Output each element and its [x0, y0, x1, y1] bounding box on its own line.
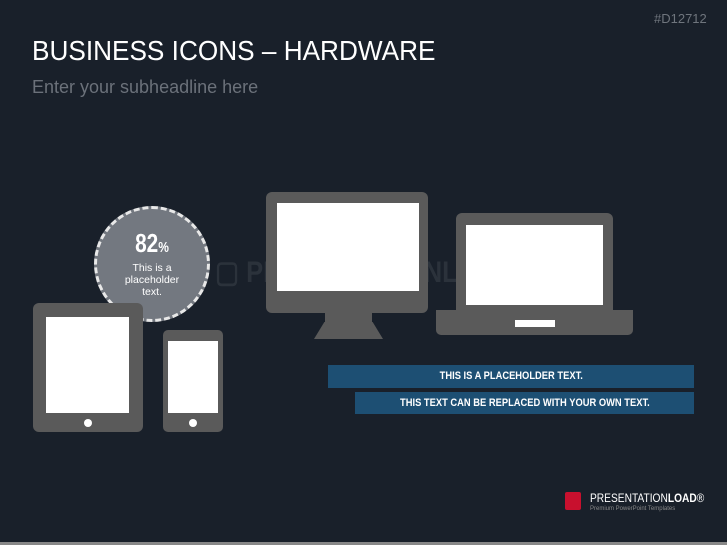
- subheadline: Enter your subheadline here: [32, 77, 258, 97]
- percentage circle: placeholder: [125, 274, 179, 286]
- watermark: ▢ PRESENTATIONLOAD: [215, 256, 514, 289]
- icon: phone: [163, 330, 223, 432]
- logo: [565, 491, 704, 512]
- banner 2: THIS TEXT CAN BE REPLACED WITH YOUR OWN TEXT.: [400, 397, 649, 409]
- banner 1: THIS IS A PLACEHOLDER TEXT.: [439, 370, 583, 382]
- icon: tablet: [33, 303, 143, 432]
- icon: monitor: [266, 192, 428, 339]
- logo: PRESENTATIONLOAD®: [590, 491, 704, 505]
- banner 1: [328, 365, 694, 388]
- banner 2: [355, 392, 694, 414]
- icon: laptop: [436, 213, 633, 335]
- logo: Premium PowerPoint Templates: [590, 506, 675, 512]
- title: BUSINESS ICONS – HARDWARE: [32, 35, 435, 66]
- percentage circle: This is a: [132, 262, 172, 274]
- percentage circle: text.: [142, 286, 162, 298]
- percentage circle: [94, 206, 210, 322]
- percentage circle: 82%: [135, 228, 169, 258]
- code tag: #D12712: [654, 11, 707, 26]
